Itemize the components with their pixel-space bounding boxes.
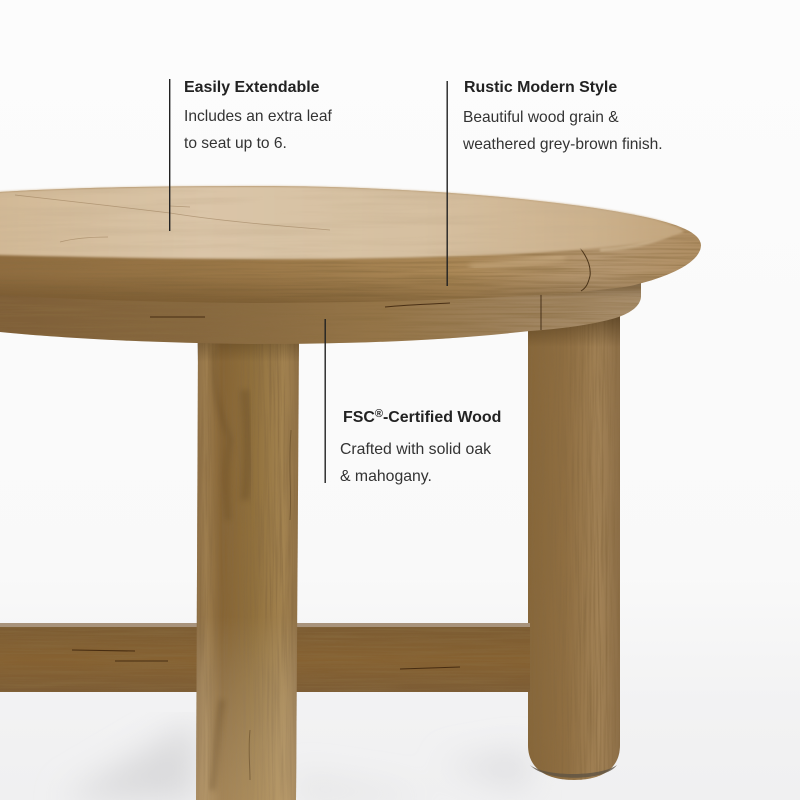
stretcher bars: [0, 623, 530, 692]
callout: Rustic Modern Style: [446, 79, 663, 286]
heading: FSC: [343, 409, 375, 426]
callout: Easily Extendable: [169, 79, 332, 231]
body text: Crafted with solid oak: [340, 441, 491, 458]
table top surface: [0, 186, 684, 259]
heading: Easily Extendable: [184, 79, 320, 96]
rear right leg: [528, 315, 620, 780]
leader line: [324, 319, 326, 483]
heading: ®: [375, 408, 383, 420]
floor shadows: [60, 720, 528, 800]
body text: Includes an extra leaf: [184, 108, 332, 125]
table top edge: [0, 186, 701, 303]
heading: Rustic Modern Style: [464, 79, 617, 96]
callout: FSC-Certified Wood: [324, 319, 501, 485]
callout: FSC-Certified Wood: & mahogany.: [340, 468, 432, 485]
leader line: [169, 79, 170, 231]
leader line: [446, 81, 448, 286]
body text: Beautiful wood grain &: [463, 109, 619, 126]
table apron: [0, 283, 641, 344]
heading: -Certified Wood: [383, 409, 501, 426]
front leg: [196, 340, 299, 800]
callout: Rustic Modern Style: weathered grey-brown finish.: [462, 136, 663, 153]
callout: Easily Extendable: to seat up to 6.: [184, 135, 287, 152]
